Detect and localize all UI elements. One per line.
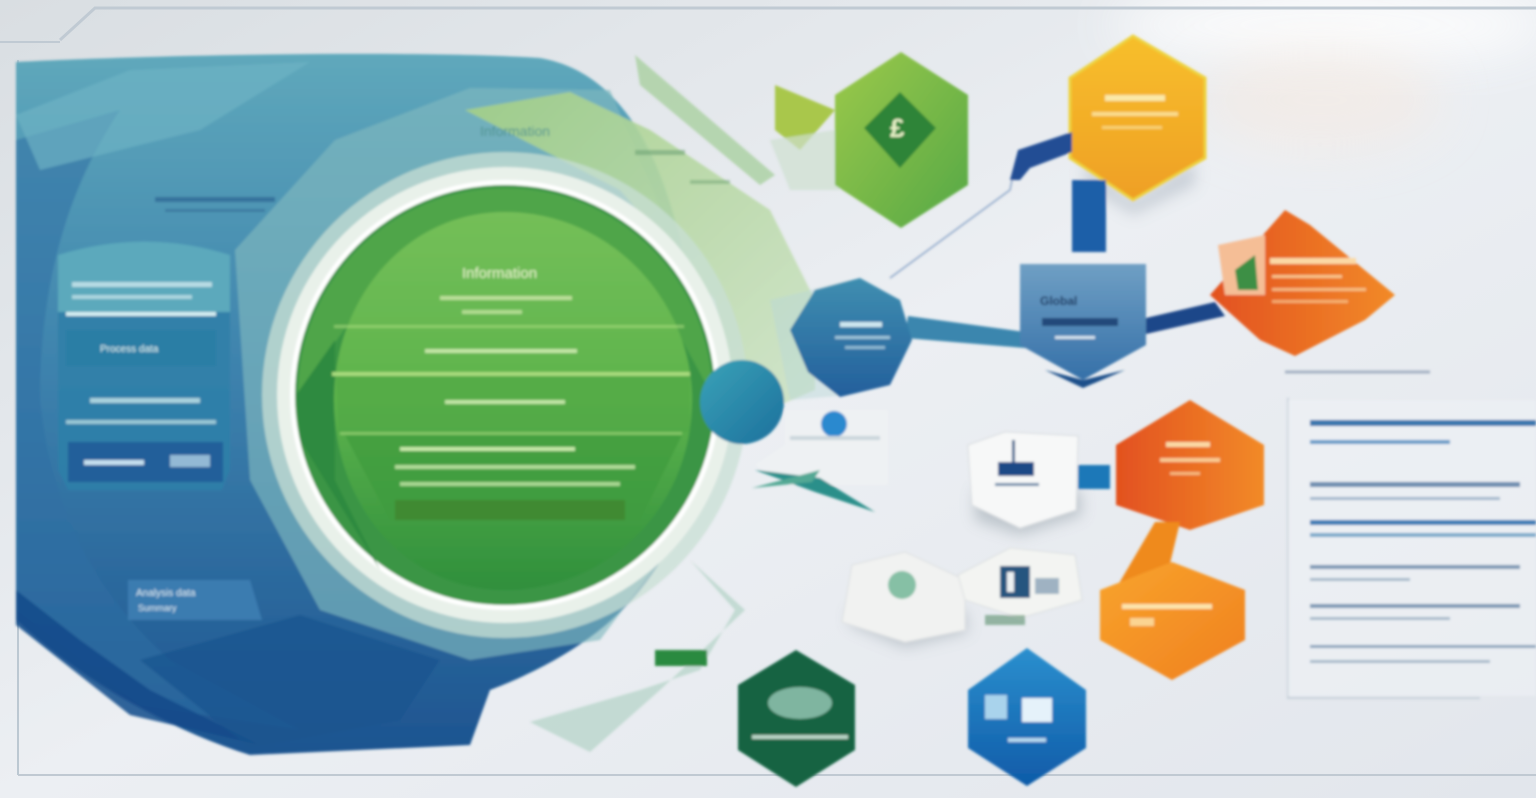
title: left top text <box>155 197 275 212</box>
panel: green fan <box>465 55 815 752</box>
panel: right text block <box>1285 372 1536 698</box>
panel: green fan: Information <box>480 123 550 139</box>
panel: left info card: Process data <box>100 344 159 355</box>
node: orange hexagon <box>1116 400 1264 530</box>
panel: left info card <box>58 242 230 490</box>
icon: green diamond: £ <box>890 113 905 143</box>
callout: small white card with blue dot <box>752 410 888 512</box>
node: white pill cards <box>842 548 1082 648</box>
panel: bottom-left label <box>128 580 262 620</box>
icon: green diamond <box>864 92 936 168</box>
small green label <box>655 650 707 666</box>
ring: outer white ring and green circle <box>262 152 748 638</box>
arrow: navy connector <box>1010 132 1106 252</box>
node: shield <box>1020 264 1146 388</box>
node: white card <box>968 432 1110 535</box>
node: amber hexagon <box>1100 562 1245 680</box>
icon: teal connector ball <box>700 360 784 444</box>
node: orange diamond <box>1210 210 1395 356</box>
arrow: navy connector right <box>1146 302 1225 334</box>
arrow: orange connector <box>1118 522 1180 585</box>
node: shield: Global <box>1040 294 1077 308</box>
panel: bottom-left label: Analysis data <box>136 588 196 599</box>
panel: bottom-left label: Summary <box>138 603 177 613</box>
node: blue circle hub <box>770 160 1025 400</box>
panel: blue swirl backdrop <box>16 54 700 755</box>
node: green hexagon <box>770 52 968 228</box>
node: blue hexagon <box>968 648 1086 786</box>
node: dark green hexagon <box>738 650 855 787</box>
panel: inner green disc <box>332 212 692 590</box>
panel: inner green disc: Information <box>462 265 537 282</box>
node: yellow hexagon <box>1070 36 1205 215</box>
